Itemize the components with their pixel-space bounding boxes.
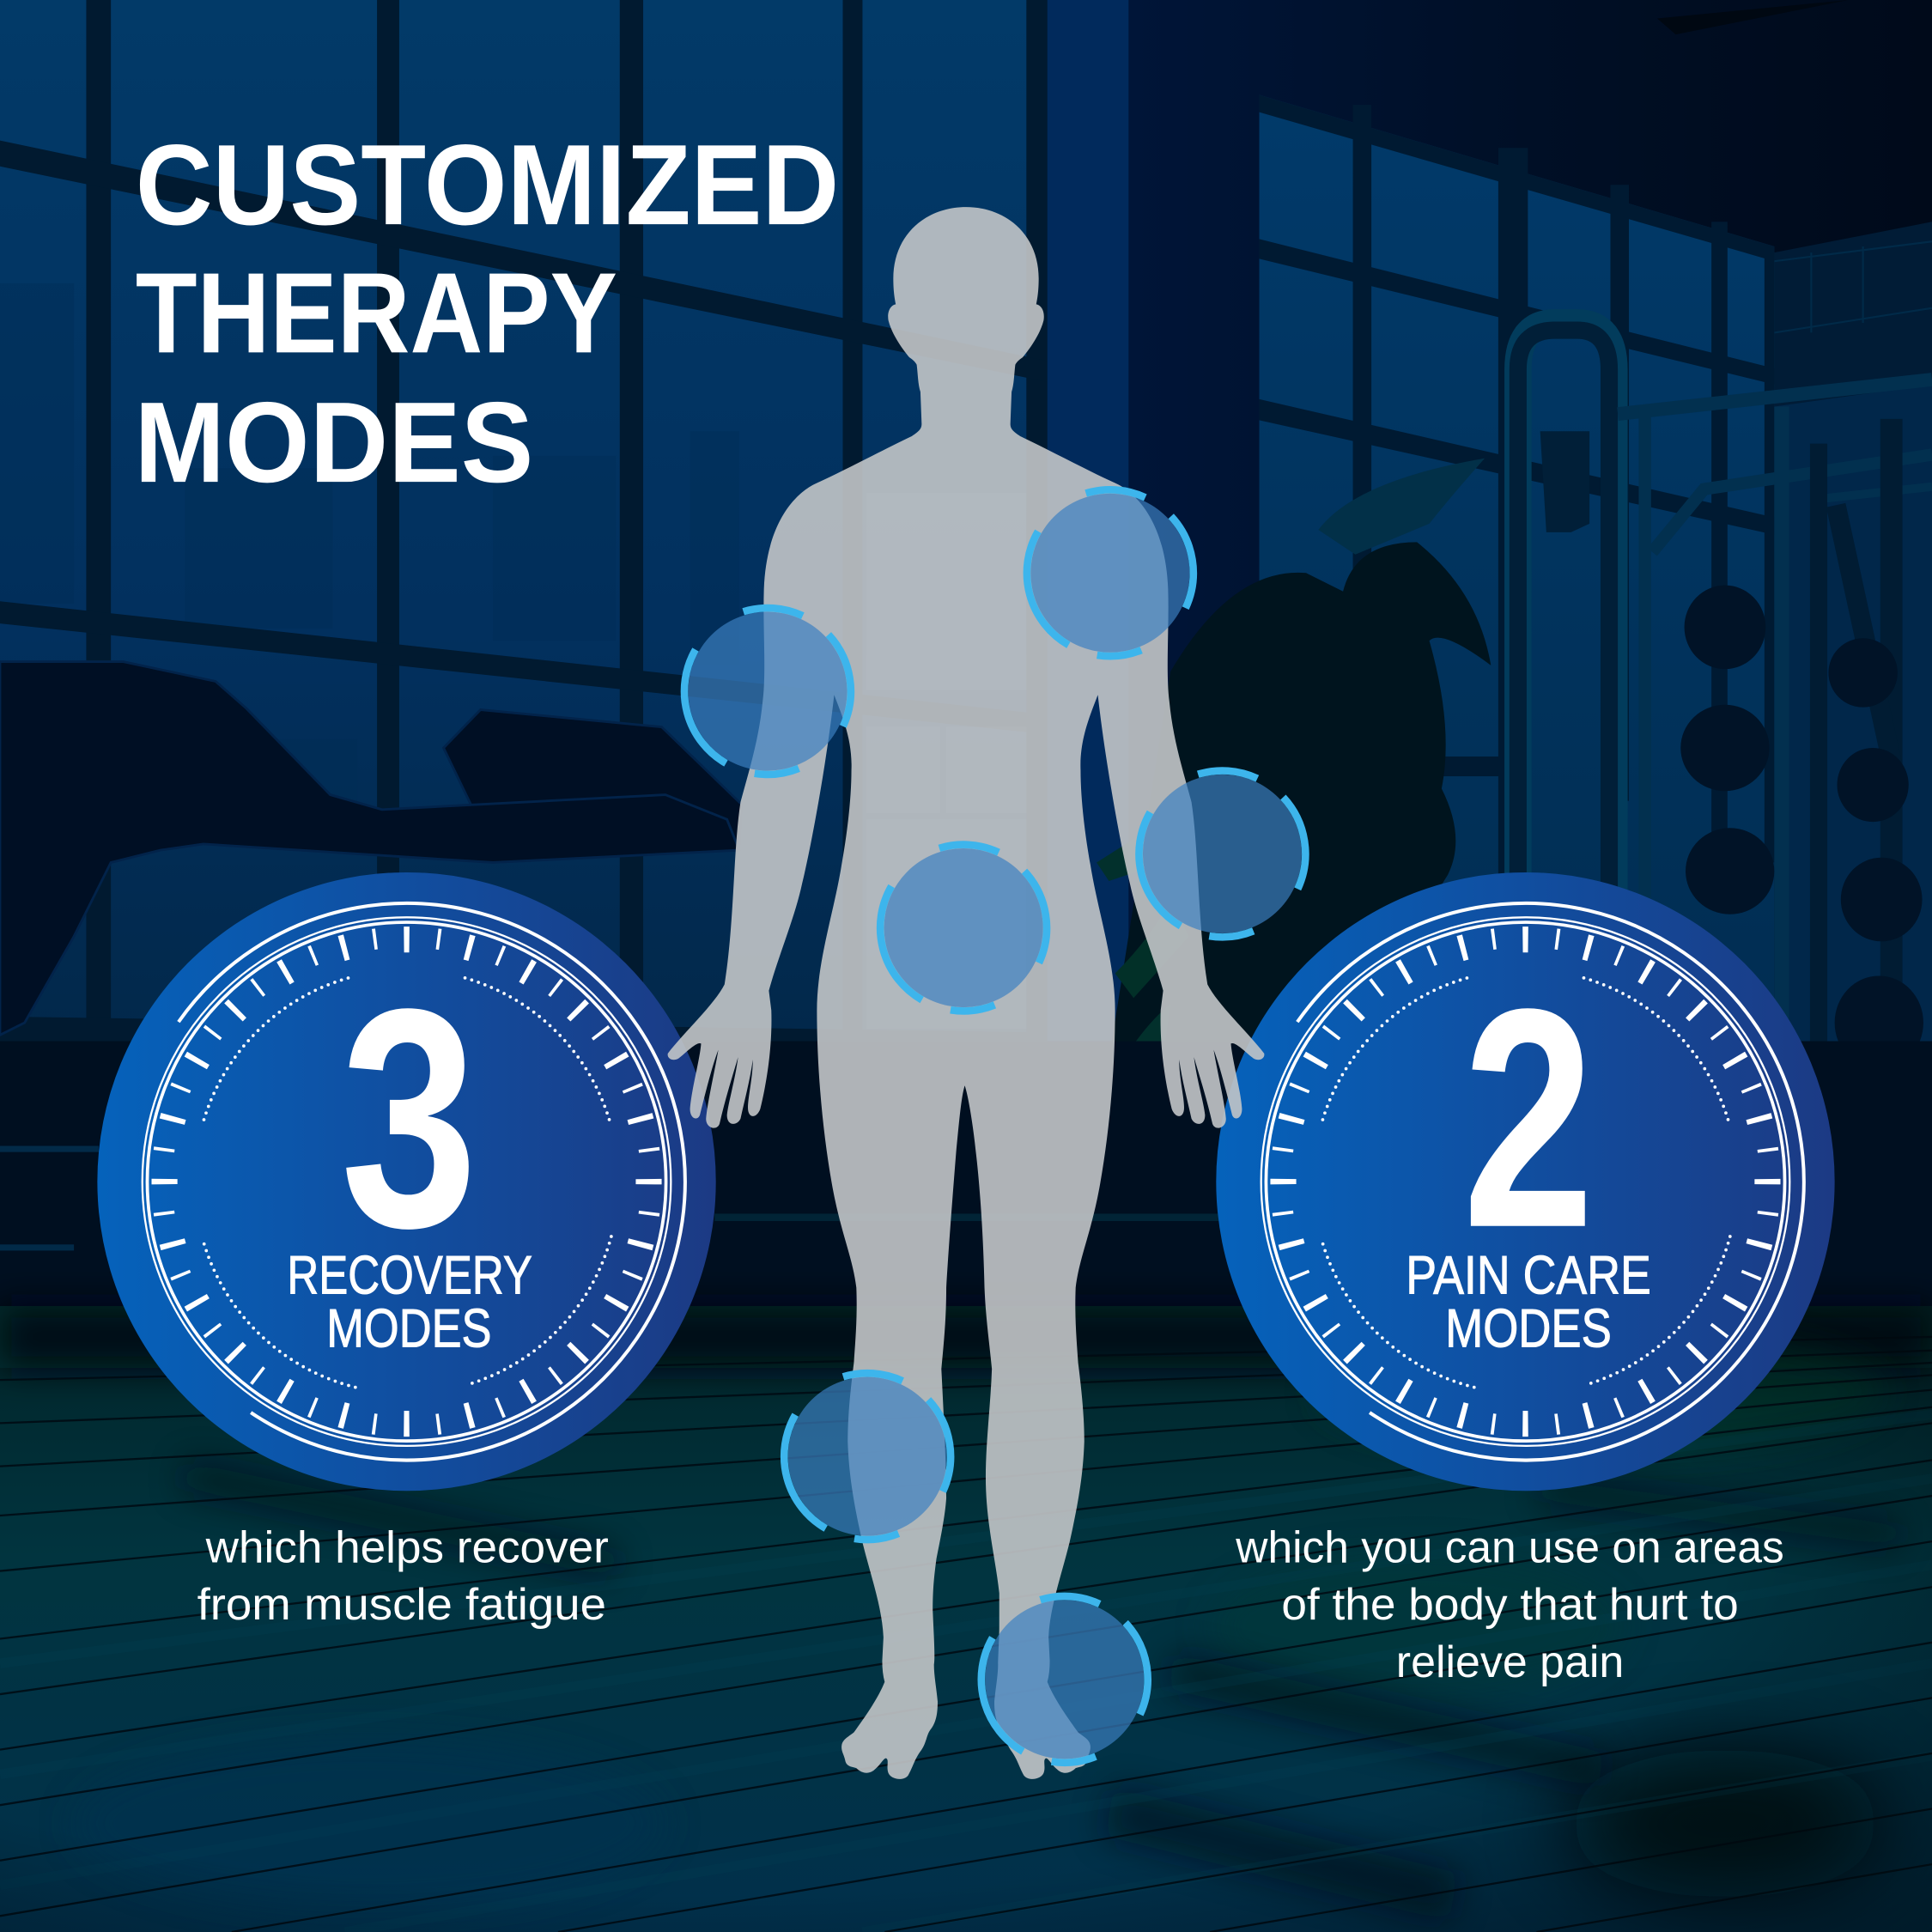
- text: pain care modes description: [1235, 1522, 1784, 1686]
- panel: 2 pain care modes dial: [1216, 872, 1835, 1491]
- right window: [1260, 94, 1932, 1109]
- label: recovery modes: RECOVERY: [287, 1246, 532, 1306]
- plant: [1097, 459, 1491, 1078]
- marker: ankle: [981, 1596, 1148, 1763]
- pillar and wall: [1048, 0, 1932, 1355]
- title: MODES: [134, 379, 533, 507]
- marker: knee: [784, 1373, 951, 1540]
- treadmills: [0, 662, 742, 1035]
- label: recovery modes: [287, 1246, 532, 1358]
- number 3: 3: [341, 945, 477, 1292]
- title: THERAPY: [136, 249, 617, 377]
- title: CUSTOMIZED: [136, 121, 839, 249]
- brick wall at right: [1774, 222, 1932, 1355]
- marker: shoulder: [1027, 489, 1194, 656]
- wooden floor: [0, 1306, 1932, 1932]
- text: recovery modes description: from muscle fatigue: [197, 1579, 606, 1629]
- text: recovery modes description: [197, 1522, 609, 1629]
- text: recovery modes description: which helps recover: [205, 1522, 609, 1572]
- marker: upper arm: [684, 608, 851, 775]
- label: pain care modes: PAIN CARE: [1406, 1246, 1651, 1306]
- text: pain care modes description: relieve pain: [1396, 1637, 1624, 1686]
- body silhouette: [668, 207, 1264, 1779]
- lower wall band and equipment: [0, 1042, 1932, 1325]
- number 2: 2: [1462, 945, 1595, 1292]
- label: pain care modes: MODES: [1445, 1298, 1612, 1358]
- torso window reflection: [866, 493, 1026, 1029]
- title: [134, 121, 839, 507]
- label: recovery modes: MODES: [326, 1298, 492, 1358]
- gym rack and weights: [1518, 323, 1932, 1232]
- marker: forearm: [1139, 771, 1305, 937]
- text: pain care modes description: of the body that hurt to: [1281, 1579, 1739, 1629]
- marker: lower back: [880, 845, 1047, 1011]
- text: pain care modes description: which you can use on areas: [1235, 1522, 1784, 1572]
- left window: [0, 0, 1048, 1054]
- panel: 3 recovery modes dial: [97, 872, 716, 1491]
- label: pain care modes: [1406, 1246, 1651, 1358]
